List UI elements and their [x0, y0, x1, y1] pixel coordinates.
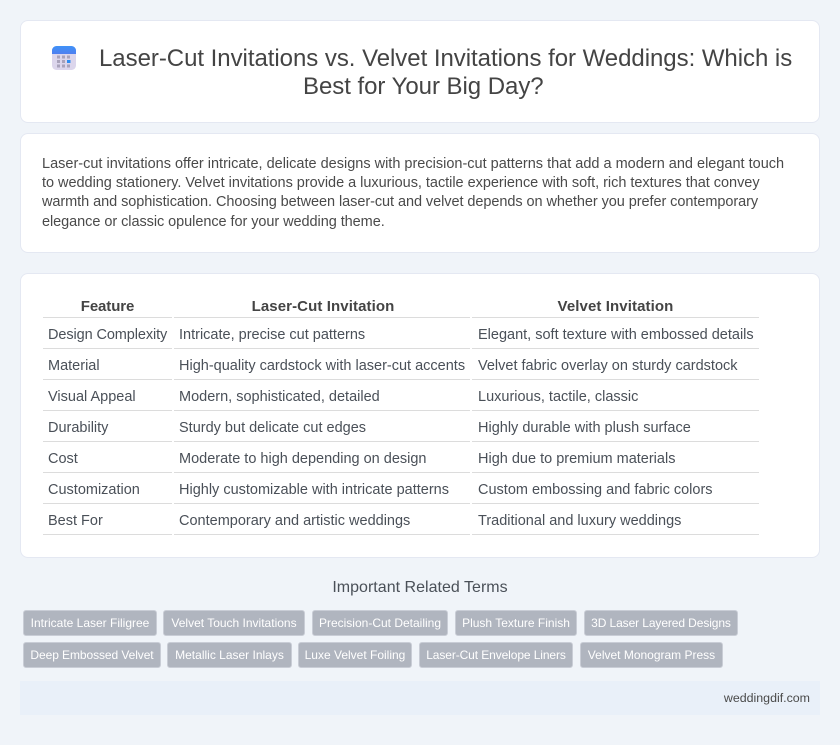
panel: introduction — [20, 133, 820, 253]
comparison table: Luxurious, tactile, classic — [478, 389, 638, 405]
related terms tags: Laser-Cut Envelope Liners — [426, 648, 566, 662]
related terms tags: 3D Laser Layered Designs — [591, 616, 731, 630]
title: Laser-Cut Invitations vs. Velvet Invitations for Weddings: Which is — [99, 45, 792, 72]
comparison table — [43, 298, 759, 535]
comparison table: Design Complexity — [48, 327, 167, 343]
related terms tags: Luxe Velvet Foiling — [305, 648, 405, 662]
comparison table: Material — [48, 358, 100, 374]
related terms tags: Deep Embossed Velvet — [30, 648, 154, 662]
comparison table: Highly durable with plush surface — [478, 420, 691, 436]
comparison table: High due to premium materials — [478, 451, 675, 467]
related terms tags: Precision-Cut Detailing — [319, 616, 441, 630]
panel: title card — [20, 20, 820, 123]
related terms tags: Velvet Monogram Press — [588, 648, 715, 662]
comparison table: Feature — [81, 298, 134, 315]
intro text: warmth and sophistication. Choosing between laser-cut and velvet depends on whether you prefer contemporary — [42, 194, 758, 210]
comparison table: Velvet Invitation — [558, 298, 673, 315]
intro text — [42, 156, 784, 230]
comparison table: High-quality cardstock with laser-cut accents — [179, 358, 465, 374]
comparison table: Elegant, soft texture with embossed details — [478, 327, 754, 343]
comparison table: Best For — [48, 513, 103, 529]
comparison table: Durability — [48, 420, 108, 436]
comparison table: Intricate, precise cut patterns — [179, 327, 365, 343]
comparison table: Velvet fabric overlay on sturdy cardstock — [478, 358, 738, 374]
comparison table: Sturdy but delicate cut edges — [179, 420, 366, 436]
title: Best for Your Big Day? — [303, 73, 544, 100]
footer source: weddingdif.com — [724, 691, 810, 705]
comparison table: Laser-Cut Invitation — [252, 298, 394, 315]
comparison table: Cost — [48, 451, 78, 467]
heading: related terms: Important Related Terms — [332, 579, 508, 596]
comparison table: Modern, sophisticated, detailed — [179, 389, 380, 405]
intro text: Laser-cut invitations offer intricate, delicate designs with precision-cut patterns that add a modern and elegant touch — [42, 156, 784, 172]
comparison table: Moderate to high depending on design — [179, 451, 426, 467]
related terms tags: Plush Texture Finish — [462, 616, 570, 630]
comparison table: Traditional and luxury weddings — [478, 513, 681, 529]
intro text: to wedding stationery. Velvet invitations provide a luxurious, tactile experience with soft, rich textures that convey — [42, 175, 760, 191]
related terms tags: Velvet Touch Invitations — [171, 616, 297, 630]
related terms tags: Intricate Laser Filigree — [31, 616, 149, 630]
footer bar — [20, 681, 820, 715]
title — [99, 45, 792, 100]
comparison table: Contemporary and artistic weddings — [179, 513, 410, 529]
comparison table: Custom embossing and fabric colors — [478, 482, 713, 498]
comparison table: Visual Appeal — [48, 389, 136, 405]
comparison table: Highly customizable with intricate patterns — [179, 482, 449, 498]
intro text: elegance or classic opulence for your wedding theme. — [42, 214, 385, 230]
related terms tags — [23, 610, 738, 668]
panel: comparison table — [20, 273, 820, 558]
comparison table: Customization — [48, 482, 140, 498]
icon: calendar — [52, 46, 76, 70]
related terms tags: Metallic Laser Inlays — [175, 648, 284, 662]
